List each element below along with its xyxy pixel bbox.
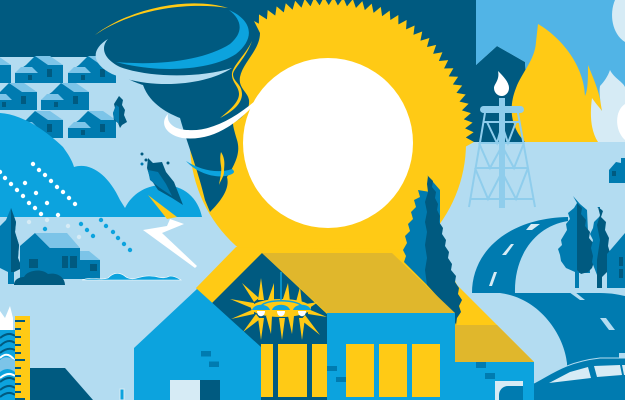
funnel: [100, 5, 260, 212]
front wall: [327, 313, 455, 400]
road: lower sweeping: [500, 292, 625, 400]
trees by the road: [558, 196, 611, 288]
house: annex: [455, 325, 534, 400]
wall bricks: [327, 366, 337, 371]
icon: lightning bolt: [143, 195, 197, 268]
panel: ground at right: [466, 142, 625, 400]
icon: car: [534, 358, 625, 400]
lower swirl: [186, 161, 234, 176]
icon: big flame: [512, 24, 606, 142]
icon: gas flame: [494, 71, 509, 96]
icon: landslide debris: [140, 152, 183, 205]
yellow squiggle: [220, 41, 252, 118]
left tree: [558, 196, 590, 288]
cloud of smoke: [612, 0, 625, 42]
panel: flood gauge: [0, 306, 30, 400]
icon: small tree: [113, 96, 127, 128]
right tree: [590, 207, 602, 275]
icon: pale flame: [591, 70, 625, 142]
rain dots: [0, 162, 77, 217]
houses neighbourhood: [0, 56, 116, 138]
icon: dark rooftop: [30, 368, 93, 400]
icon: small house far right: [609, 158, 625, 183]
gold roof: [262, 253, 455, 313]
lower squiggle: [219, 152, 224, 185]
house: left blue: [134, 289, 261, 400]
tornado: [95, 3, 265, 212]
icon: oil derrick: [469, 71, 535, 208]
icon: pale post: [120, 389, 124, 400]
road: winding upper: [472, 217, 568, 293]
bright swirl: [116, 10, 249, 69]
pale swirl: [96, 39, 232, 84]
icon: central trees: [403, 175, 462, 325]
windows left: [261, 344, 273, 397]
yellow ruler: [15, 316, 30, 400]
dark gable: [212, 253, 327, 400]
house: main: [212, 253, 455, 400]
icon: tree by lake house: [0, 208, 22, 284]
panel: dark sky: [0, 0, 530, 142]
panel: wildfire sky: [476, 0, 625, 142]
icon: house by road: [607, 233, 625, 288]
bushes: [14, 270, 65, 285]
icon: lake house: [14, 233, 100, 285]
panel: rain hill: [0, 113, 202, 252]
chandelier: [230, 272, 327, 340]
white sun disc: [243, 58, 413, 228]
yellow swirl arc: [95, 3, 228, 35]
icon: sun: [190, 0, 534, 400]
water ripple: [82, 273, 181, 280]
white swirl: [164, 92, 265, 139]
windows right: [346, 344, 374, 397]
